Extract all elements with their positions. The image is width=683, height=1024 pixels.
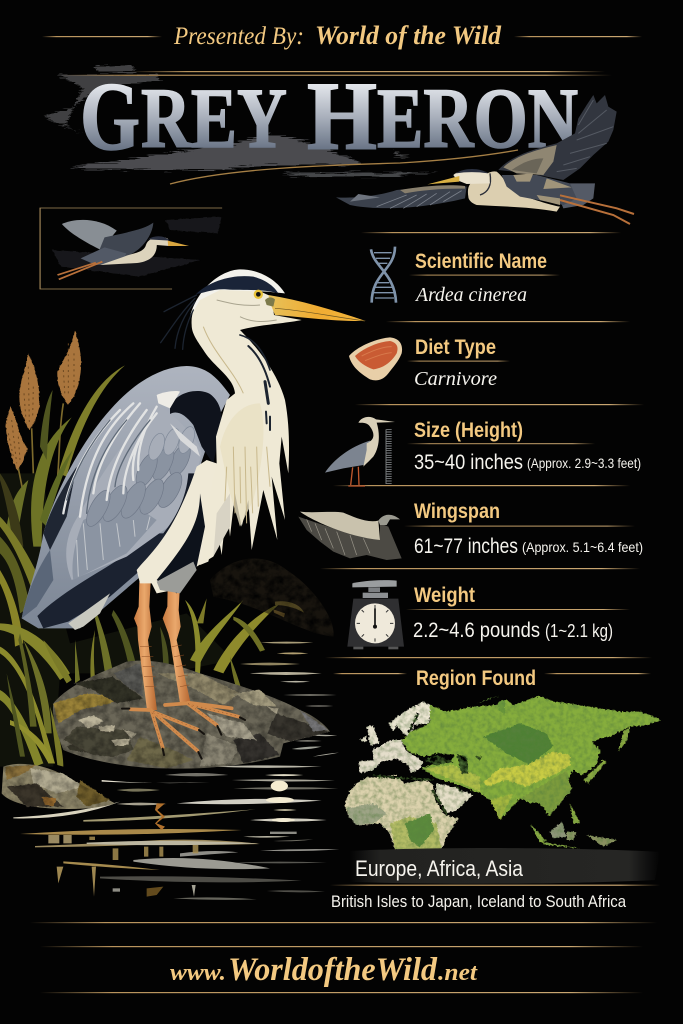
stat: scientific name: Ardea cinerea [414, 284, 527, 306]
map: europe [358, 740, 423, 773]
stat: wingspan [298, 500, 643, 560]
stat: weight: (1~2.1 kg) [545, 621, 613, 641]
range map [345, 695, 662, 850]
rock: small left [2, 764, 115, 809]
illustration: reeds behind heron [0, 331, 334, 767]
icon: standing heron with ruler [325, 417, 395, 486]
footer [30, 922, 657, 993]
dark primaries [37, 533, 173, 628]
seed heads [6, 331, 81, 470]
stat: wingspan: Wingspan [414, 500, 500, 523]
title text: G [80, 63, 140, 171]
long scapular plumes [63, 403, 157, 517]
stat: size height: (Approx. 2.9~3.3 feet) [527, 455, 641, 471]
dark brush band [350, 848, 660, 884]
crown [190, 269, 285, 317]
region caption: Europe, Africa, Asia [355, 856, 524, 881]
header: presented by: World of the Wild [315, 21, 502, 50]
icon: meat steak [349, 337, 402, 380]
pale feather lines [77, 517, 150, 577]
stat: diet type: Diet Type [415, 336, 496, 359]
face line [217, 300, 277, 321]
stat: wingspan: 61~77 inches [414, 535, 518, 558]
near water glints [13, 765, 339, 900]
region caption [330, 848, 660, 911]
icon: kitchen scale [347, 580, 404, 649]
icon: heron wings spread [298, 512, 402, 560]
stat: diet type: Carnivore [414, 368, 497, 390]
title text [80, 63, 578, 171]
stat: weight [347, 580, 630, 649]
wing coverts [66, 403, 202, 580]
illustration: main heron [22, 269, 366, 759]
black shoulder [170, 391, 222, 464]
map: inland seas [423, 755, 482, 793]
brush strokes behind title [44, 65, 440, 177]
footer: WorldoftheWild [228, 952, 437, 988]
eye [254, 290, 263, 299]
neck and chest plumes [192, 287, 302, 565]
wing and back [22, 366, 230, 628]
belly [137, 460, 230, 593]
title text: H [307, 63, 377, 171]
icon: dna helix [371, 247, 396, 303]
illustration: heron in flight (top right) [336, 95, 634, 224]
dark mound behind reeds [210, 559, 334, 637]
title text: ERON [377, 70, 578, 166]
map: islands [583, 727, 630, 783]
neck streaks [240, 335, 270, 430]
region caption: British Isles to Japan, Iceland to South Africa [331, 892, 626, 911]
map: africa and arabia [345, 775, 458, 850]
website url: www. [170, 960, 226, 986]
stat: size height: Size (Height) [414, 419, 523, 442]
stat: weight: Weight [414, 584, 475, 607]
header: presented by [42, 21, 642, 50]
inset box: small heron in flight [40, 208, 222, 289]
grass blades [0, 365, 304, 767]
far water glints [240, 642, 339, 757]
toes [122, 703, 245, 759]
title text: REY [141, 70, 287, 166]
rock: main [53, 661, 330, 769]
vertical reflections [48, 803, 198, 897]
header: presented by: Presented By: [173, 23, 304, 50]
stat: size height [325, 417, 641, 486]
footer: .net [438, 960, 478, 986]
stat: wingspan: (Approx. 5.1~6.4 feet) [522, 539, 643, 555]
stat: scientific name [371, 247, 560, 306]
beak [268, 295, 366, 321]
illustration: pond water and reflections [2, 642, 339, 900]
stat: weight: 2.2~4.6 pounds [413, 619, 540, 642]
heading: region found: Region Found [416, 667, 536, 690]
stat: diet type [349, 336, 510, 390]
legs [134, 582, 191, 710]
underwing black stripe [163, 473, 197, 535]
map: asia [402, 696, 662, 820]
crest plumes [161, 295, 197, 349]
stat: scientific name: Scientific Name [415, 250, 547, 273]
title banner [44, 63, 612, 184]
stat dividers [320, 232, 652, 658]
stat: size height: 35~40 inches [414, 451, 523, 474]
